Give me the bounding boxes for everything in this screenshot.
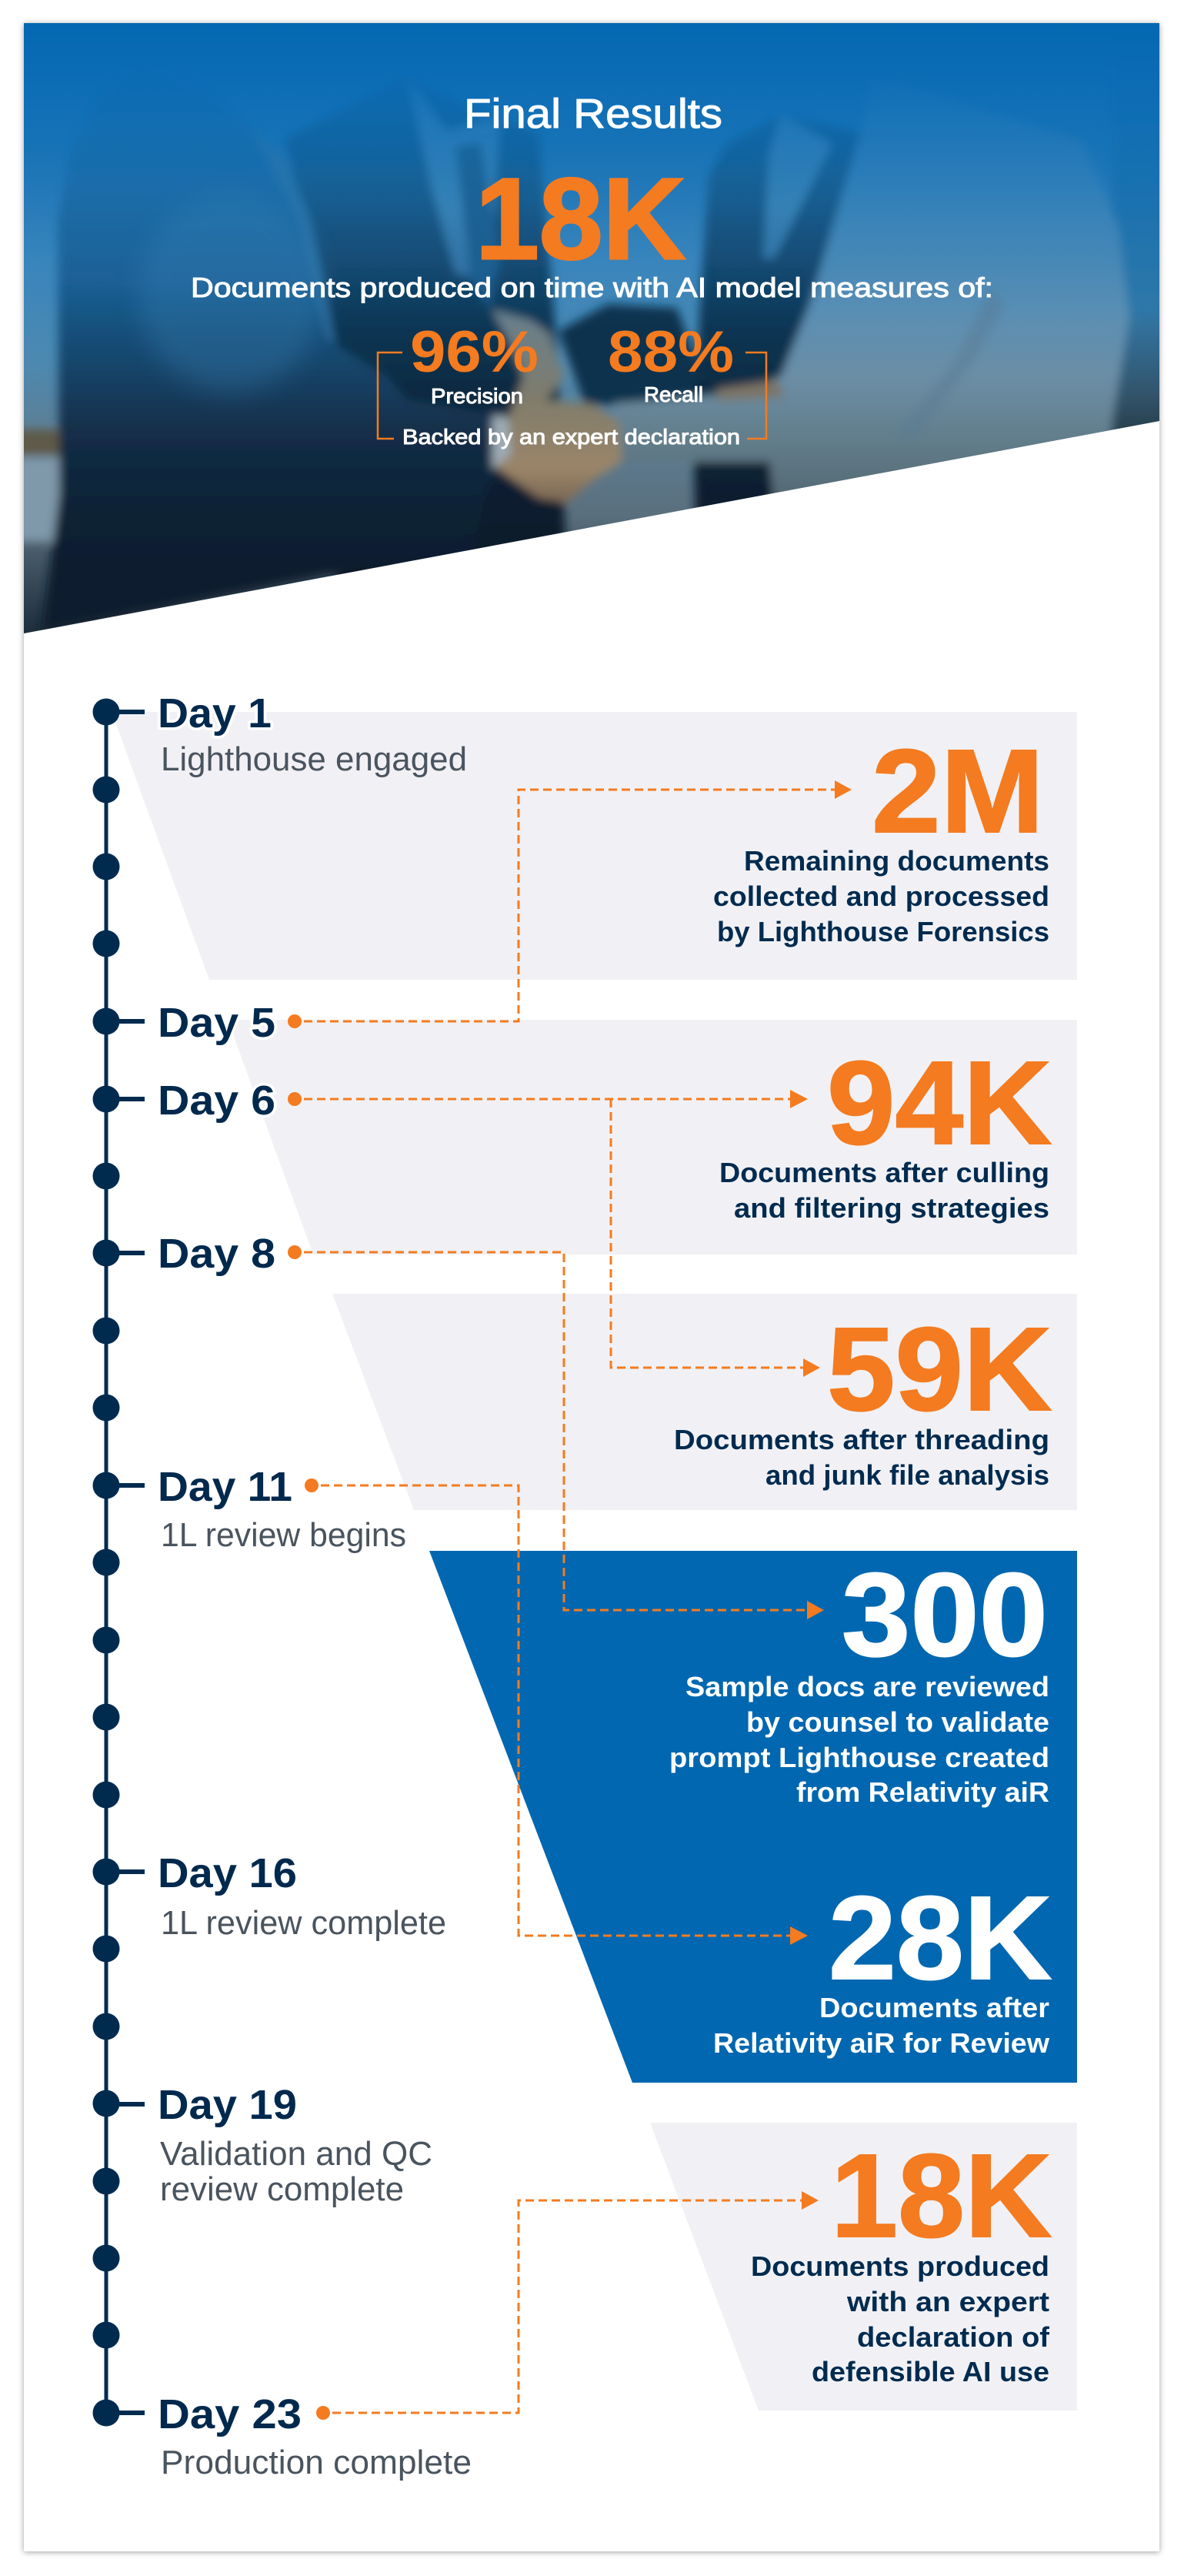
stat block: 59K: Documents after threading bbox=[674, 1424, 1049, 1455]
stat block: 59K: 59K bbox=[827, 1303, 1052, 1435]
connector: Day 5 to 2M bbox=[288, 780, 852, 1028]
panel: 94K background bbox=[228, 1020, 1077, 1255]
stat block: 28K: 28K bbox=[829, 1872, 1052, 2004]
hero panel: photo of business handshake with blue overlay bbox=[15, 15, 1173, 639]
stat block: 2M: 2M bbox=[872, 725, 1044, 857]
stat block: 2M: collected and processed bbox=[713, 880, 1049, 912]
stat block: 94K: Documents after culling bbox=[719, 1157, 1049, 1188]
milestone: Day 1 bbox=[158, 690, 467, 778]
stat block: 59K: and junk file analysis bbox=[765, 1459, 1049, 1491]
milestone: Day 19: Day 19 bbox=[158, 2082, 297, 2128]
connector: Day 8 to 300 bbox=[288, 1245, 824, 1619]
backed by expert declaration: Backed by an expert declaration bbox=[402, 425, 740, 449]
milestone: Day 16: Day 16 bbox=[158, 1850, 297, 1896]
panel: 300 and 28K blue background bbox=[429, 1551, 1077, 2083]
stat: 88% recall: 88% bbox=[608, 319, 734, 385]
bracket around measures bbox=[378, 352, 766, 439]
timeline spine with dots bbox=[92, 699, 145, 2426]
third figure shirt bbox=[763, 115, 832, 259]
soft highlight on left sleeve bbox=[140, 225, 319, 399]
milestone: Day 19 bbox=[158, 2082, 432, 2208]
connector: Day 23 to final 18K bbox=[316, 2191, 819, 2420]
stat: 88% recall: Recall bbox=[644, 383, 703, 406]
stat block: final 18K: declaration of bbox=[857, 2321, 1050, 2353]
heading: Final Results: Final Results bbox=[464, 91, 722, 137]
middle figure shirt bbox=[408, 77, 500, 277]
blue colour overlay bbox=[260, 81, 1109, 272]
background detail: left brown band bbox=[15, 429, 63, 456]
connector: Day 11 to 28K bbox=[305, 1478, 808, 1945]
stat block: final 18K: Documents produced bbox=[751, 2250, 1049, 2282]
background detail: far right wall bbox=[1112, 15, 1173, 446]
milestone: Day 23: Production complete bbox=[161, 2444, 472, 2481]
big stat: 18K: 18K bbox=[475, 154, 685, 283]
stat block: 300: from Relativity aiR bbox=[796, 1776, 1049, 1808]
stat: 96% precision bbox=[410, 319, 539, 408]
middle figure tie bbox=[455, 142, 500, 308]
stat block: final 18K: 18K bbox=[831, 2130, 1052, 2262]
stat block: 300: 300 bbox=[842, 1549, 1048, 1681]
milestone: Day 19: review complete bbox=[160, 2170, 404, 2208]
milestone: Day 11: 1L review begins bbox=[161, 1516, 406, 1554]
stat block: final 18K: defensible AI use bbox=[812, 2356, 1049, 2387]
stat: 96% precision: 96% bbox=[410, 319, 539, 385]
panel: final 18K background bbox=[650, 2123, 1077, 2411]
stat block: 2M bbox=[713, 725, 1049, 947]
milestone: Day 1: Lighthouse engaged bbox=[161, 740, 467, 778]
stat block: 300: Sample docs are reviewed bbox=[685, 1671, 1049, 1702]
third figure suit bbox=[692, 115, 861, 539]
subheading: documents produced: Documents produced on time with AI model measures of: bbox=[191, 272, 993, 303]
stat block: 28K: Documents after bbox=[819, 1992, 1049, 2023]
stat block: 94K bbox=[719, 1037, 1052, 1224]
stat block: final 18K: with an expert bbox=[846, 2286, 1049, 2317]
stat block: 94K: and filtering strategies bbox=[734, 1192, 1049, 1224]
milestone: Day 16: 1L review complete bbox=[161, 1904, 446, 1942]
stat block: 2M: Remaining documents bbox=[744, 845, 1049, 877]
milestone: Day 23: Day 23 bbox=[158, 2391, 302, 2437]
stat block: 300: prompt Lighthouse created bbox=[669, 1742, 1049, 1773]
background detail: left pale strip bbox=[15, 457, 63, 542]
handshake hands bbox=[492, 309, 622, 503]
middle figure suit bbox=[285, 77, 565, 600]
stat block: 28K bbox=[713, 1872, 1052, 2059]
stat block: 59K bbox=[674, 1303, 1052, 1491]
stat block: 28K: Relativity aiR for Review bbox=[713, 2027, 1050, 2059]
right figure jacket bbox=[602, 114, 1134, 494]
left figure suit bbox=[38, 152, 494, 631]
milestone: Day 16 bbox=[158, 1850, 446, 1942]
stat block: 300 bbox=[669, 1549, 1049, 1808]
stat block: 94K: 94K bbox=[827, 1037, 1052, 1169]
stat block: final 18K bbox=[751, 2130, 1052, 2387]
stat: 96% precision: Precision bbox=[431, 384, 523, 408]
milestone: Day 1: Day 1 bbox=[158, 690, 272, 737]
right figure arm shadow bbox=[934, 292, 1002, 397]
third figure sleeve bbox=[559, 304, 696, 408]
milestone: Day 6: Day 6 bbox=[158, 1078, 275, 1124]
stat: 88% recall bbox=[608, 319, 734, 406]
milestone: Day 11: Day 11 bbox=[158, 1464, 292, 1510]
stat block: 2M: by Lighthouse Forensics bbox=[717, 916, 1049, 947]
right hand fingers bbox=[717, 380, 785, 400]
milestone: Day 8: Day 8 bbox=[158, 1231, 275, 1277]
left figure lighter lapel bbox=[265, 143, 340, 348]
panel: 2M background bbox=[112, 712, 1077, 980]
milestone: Day 19: Validation and QC bbox=[160, 2135, 432, 2173]
milestone: Day 11 bbox=[158, 1464, 406, 1554]
panel: 59K background bbox=[332, 1294, 1077, 1510]
milestone: Day 23 bbox=[158, 2391, 472, 2481]
milestone: Day 5: Day 5 bbox=[158, 1000, 275, 1046]
connector: Day 6 to 94K and 59K bbox=[288, 1090, 820, 1377]
left cuff bbox=[492, 416, 511, 469]
stat block: 300: by counsel to validate bbox=[746, 1706, 1049, 1738]
